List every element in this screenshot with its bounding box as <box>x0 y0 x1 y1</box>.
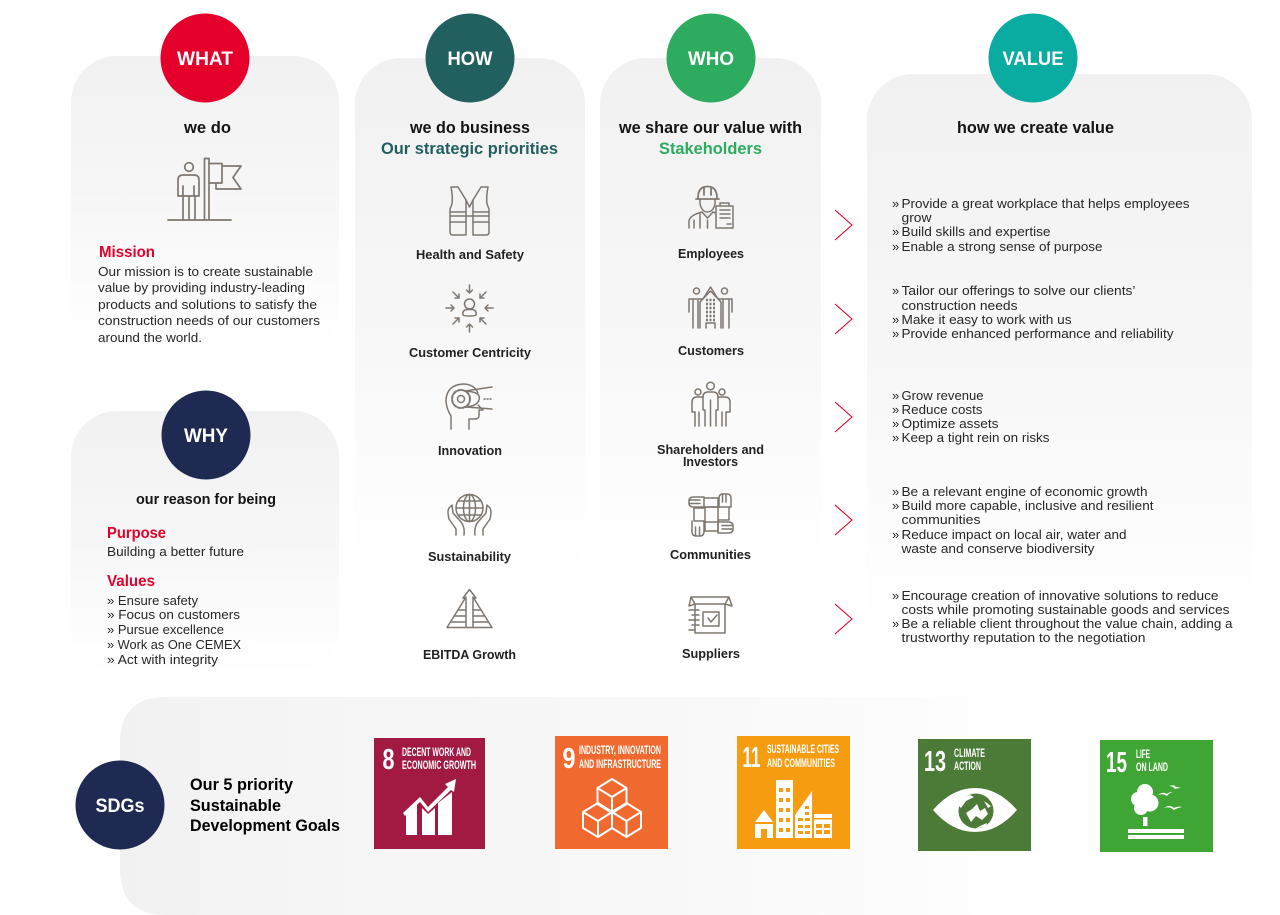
heading: we do business: Our strategic priorities <box>381 140 558 158</box>
sdg 11 tile: 11 <box>742 742 760 774</box>
list: supplier value: costs while promoting sustainable goods and services <box>902 602 1230 617</box>
list: customer value <box>892 283 1174 341</box>
sdg 13 tile <box>918 739 1031 851</box>
sdg 13 tile: CLIMATE <box>954 748 985 760</box>
sdg 8 tile: DECENT WORK AND <box>402 747 471 759</box>
label: shareholders and investors: Investors <box>683 455 738 469</box>
sdg 13 tile: ACTION <box>954 761 981 773</box>
heading: we share our value with stakeholders: we share our value with <box>618 119 802 137</box>
panel: who <box>600 14 821 661</box>
icon: employee with clipboard <box>689 186 733 228</box>
list: customer value: Provide enhanced performance and reliability <box>902 326 1174 341</box>
list: community value: waste and conserve biodiversity <box>900 541 1095 556</box>
label: employees: Employees <box>678 247 744 261</box>
label: customers: Customers <box>678 344 744 358</box>
icon: customers and building <box>689 287 732 328</box>
list: customer value: Tailor our offerings to solve our clients’ <box>902 283 1136 298</box>
list: employee value: » <box>892 224 899 239</box>
list: employee value: Build skills and expertise <box>902 224 1050 239</box>
panel: sdgs <box>76 697 1213 915</box>
panel: what <box>71 14 339 356</box>
badge: value <box>988 14 1078 102</box>
icon: pyramid with arrow <box>447 590 492 628</box>
heading: we do business <box>381 119 558 158</box>
icon: interlocking hands <box>689 494 733 536</box>
badge: who: WHO <box>688 48 734 70</box>
label: communities: Communities <box>670 548 751 562</box>
icon: hands holding globe <box>448 494 491 535</box>
badge: why <box>162 390 250 480</box>
sdg 8 tile <box>374 738 485 849</box>
list: community value: » <box>892 527 899 542</box>
list: community value: Build more capable, inclusive and resilient <box>902 498 1154 513</box>
icon: tree and birds <box>1128 784 1184 839</box>
text: mission statement: products and solutions to satisfy the <box>98 297 317 312</box>
list: customer value: » <box>892 283 899 298</box>
list: values: » Act with integrity <box>107 652 219 667</box>
badge: what <box>160 14 250 102</box>
sdg 15 tile: ON LAND <box>1136 762 1168 774</box>
panel: value <box>867 14 1252 645</box>
text: mission statement: value by providing industry-leading <box>98 280 305 295</box>
list: employee value: grow <box>902 210 932 225</box>
list: employee value: Provide a great workplace that helps employees <box>902 196 1190 211</box>
list: values: » Ensure safety <box>107 593 199 608</box>
label: ebitda growth: EBITDA Growth <box>423 648 516 662</box>
why panel background <box>71 411 339 676</box>
list: community value: Reduce impact on local air, water and <box>902 527 1126 542</box>
list: shareholder value: Optimize assets <box>902 416 999 431</box>
badge: sdgs <box>76 760 164 850</box>
label: shareholders and investors <box>657 443 764 469</box>
heading: our 5 priority sustainable development goals: Sustainable <box>190 797 281 815</box>
list: values: » Pursue excellence <box>107 622 224 637</box>
list: supplier value: trustworthy reputation to the negotiation <box>902 630 1146 645</box>
list: community value: » <box>892 484 899 499</box>
badge: value: VALUE <box>1002 48 1064 70</box>
sdg 13 tile: 13 <box>924 746 946 778</box>
list: supplier value <box>892 588 1233 645</box>
sdg 11 tile <box>737 736 850 849</box>
heading: values: Values <box>107 573 155 590</box>
list: community value: Be a relevant engine of economic growth <box>902 484 1148 499</box>
icon: customer centricity arrows <box>446 285 493 332</box>
sdg 15 tile <box>1100 740 1213 852</box>
label: suppliers: Suppliers <box>682 647 740 661</box>
arrow: customers to value <box>835 304 852 334</box>
badge: why: WHY <box>184 425 228 447</box>
sdg panel background <box>120 697 1060 915</box>
icon: growth chart <box>403 779 456 835</box>
sdg 11 tile: SUSTAINABLE CITIES <box>767 744 839 756</box>
who panel background <box>600 58 821 583</box>
sdg 8 tile: ECONOMIC GROWTH <box>402 760 476 772</box>
text: mission statement: Our mission is to create sustainable <box>98 264 313 279</box>
badge: who <box>666 14 756 102</box>
sdg 15 tile: 15 <box>1106 747 1127 779</box>
label: sustainability: Sustainability <box>428 550 511 564</box>
label: shareholders and investors: Shareholders and <box>657 443 764 457</box>
list: supplier value: » <box>892 588 899 603</box>
heading: we share our value with stakeholders <box>618 119 802 158</box>
list: shareholder value <box>892 388 1050 445</box>
icon: stacked cubes <box>583 779 641 837</box>
list: community value: » <box>892 498 899 513</box>
list: customer value: Make it easy to work with us <box>902 312 1072 327</box>
badge: sdgs: SDGs <box>96 795 145 817</box>
list: shareholder value: » <box>892 430 899 445</box>
sdg 15 tile: LIFE <box>1136 749 1150 761</box>
icon: shareholders and investors <box>692 382 730 426</box>
icon: city buildings <box>755 780 832 838</box>
sdg 9 tile: 9 <box>562 743 576 775</box>
panel: how <box>355 14 585 662</box>
list: employee value: » <box>892 239 899 254</box>
arrow: employees to value <box>835 210 852 240</box>
list: shareholder value: » <box>892 402 899 417</box>
list: values <box>107 593 241 667</box>
heading: our reason for being: our reason for being <box>136 492 276 508</box>
badge: how <box>426 14 514 102</box>
heading: we share our value with stakeholders: Stakeholders <box>659 140 762 158</box>
list: customer value: » <box>892 326 899 341</box>
list: shareholder value: Grow revenue <box>902 388 984 403</box>
list: customer value: construction needs <box>902 298 1018 313</box>
heading: we do business: we do business <box>409 119 530 137</box>
text: mission statement: around the world. <box>98 330 202 345</box>
list: employee value <box>892 196 1190 254</box>
what panel background <box>71 56 339 356</box>
list: shareholder value: Reduce costs <box>902 402 983 417</box>
list: community value: communities <box>902 512 981 527</box>
heading: our 5 priority sustainable development goals: Development Goals <box>190 817 340 835</box>
icon: safety vest <box>450 187 489 235</box>
text: mission statement: construction needs of our customers <box>98 313 321 328</box>
text: purpose statement: Building a better future <box>107 544 244 559</box>
list: shareholder value: » <box>892 416 899 431</box>
list: shareholder value: Keep a tight rein on risks <box>902 430 1050 445</box>
label: customer centricity: Customer Centricity <box>409 346 531 360</box>
heading: we do: we do <box>183 119 231 137</box>
sdg 11 tile: AND COMMUNITIES <box>767 758 835 770</box>
arrow: shareholders to value <box>835 402 852 432</box>
text: mission statement <box>98 264 321 345</box>
list: supplier value: » <box>892 616 899 631</box>
heading: mission: Mission <box>99 244 155 261</box>
heading: how we create value: how we create value <box>957 119 1114 137</box>
list: shareholder value: » <box>892 388 899 403</box>
badge: how: HOW <box>448 48 493 70</box>
list: values: » Work as One CEMEX <box>107 637 241 652</box>
sdg 8 tile: 8 <box>382 744 394 776</box>
sdg 9 tile <box>555 736 668 849</box>
sdg 9 tile: AND INFRASTRUCTURE <box>579 759 661 771</box>
icon: supplier box <box>689 597 732 633</box>
heading: our 5 priority sustainable development goals <box>190 776 340 835</box>
label: health and safety: Health and Safety <box>416 248 524 262</box>
heading: purpose: Purpose <box>107 525 166 542</box>
list: employee value: » <box>892 196 899 211</box>
arrow: communities to value <box>835 505 852 535</box>
label: innovation: Innovation <box>438 444 502 458</box>
badge: what: WHAT <box>177 48 233 70</box>
list: supplier value: Be a reliable client throughout the value chain, adding a <box>902 616 1233 631</box>
list: values: » Focus on customers <box>107 607 241 622</box>
value panel background <box>867 74 1252 644</box>
icon: head with gear <box>446 384 492 429</box>
sdg 9 tile: INDUSTRY, INNOVATION <box>579 745 661 757</box>
panel: why <box>71 390 339 676</box>
list: customer value: » <box>892 312 899 327</box>
list: community value <box>892 484 1154 556</box>
list: supplier value: Encourage creation of innovative solutions to reduce <box>902 588 1218 603</box>
how panel background <box>355 58 585 583</box>
icon: eye with globe <box>933 788 1017 832</box>
arrow: suppliers to value <box>835 604 852 634</box>
list: employee value: Enable a strong sense of purpose <box>902 239 1102 254</box>
icon: person with flag <box>168 158 241 220</box>
heading: our 5 priority sustainable development goals: Our 5 priority <box>190 776 294 794</box>
